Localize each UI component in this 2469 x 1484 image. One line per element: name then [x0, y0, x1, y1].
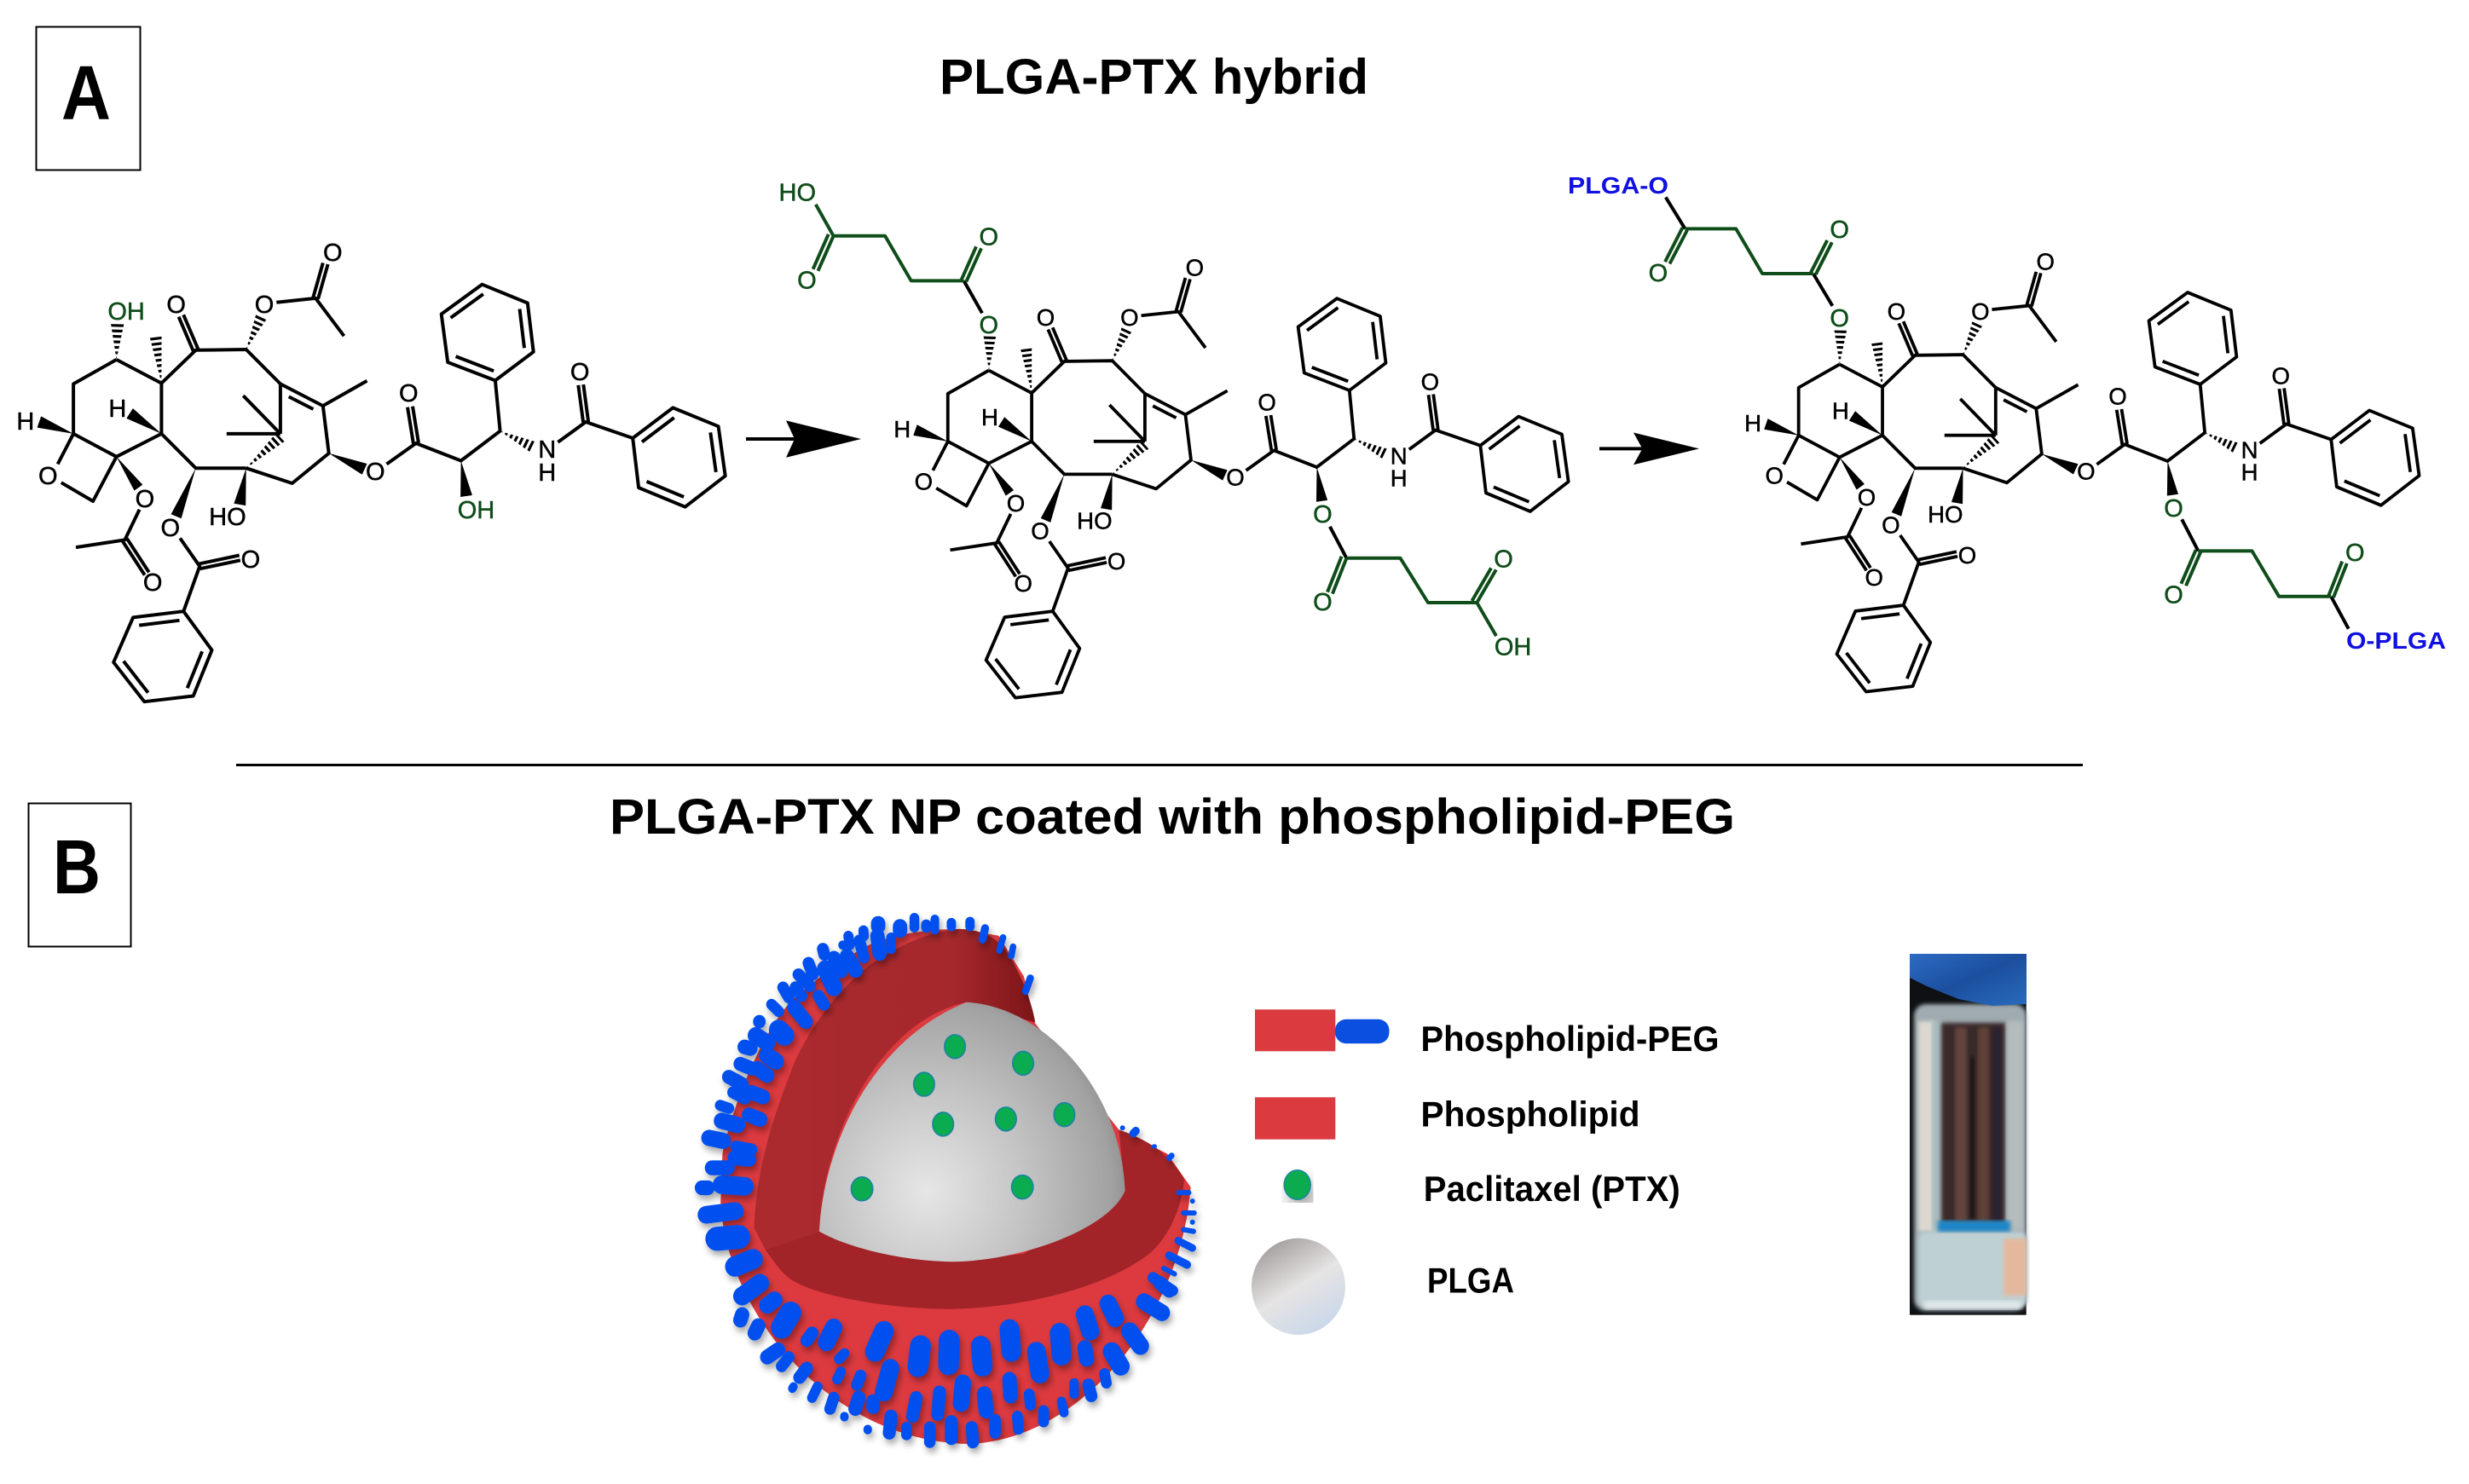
photo of vial	[1910, 954, 2027, 1315]
molecule: PLGA-PTX hybrid: O	[1971, 298, 1990, 325]
molecule: PLGA-PTX hybrid: O-PLGA	[2346, 627, 2446, 654]
legend	[1252, 1009, 1719, 1335]
molecule: paclitaxel succinate: O	[980, 312, 998, 339]
molecule: paclitaxel: O	[323, 240, 343, 267]
panel label A: A	[61, 51, 111, 136]
molecule: paclitaxel: O	[255, 292, 274, 319]
molecule: paclitaxel: O	[143, 569, 162, 597]
cut wall of the shell	[754, 929, 1035, 1250]
panel label B: B	[53, 825, 101, 910]
molecule: paclitaxel succinate: O	[797, 268, 817, 295]
molecule: paclitaxel succinate: O	[1186, 255, 1204, 281]
molecule: PLGA-PTX hybrid: O	[2108, 383, 2127, 409]
legend swatch: paclitaxel dot	[1284, 1170, 1310, 1199]
molecule: PLGA-PTX hybrid: H	[2241, 459, 2258, 485]
legend label: Phospholipid: Phospholipid	[1420, 1094, 1640, 1134]
molecule: PLGA-PTX hybrid: O	[2077, 458, 2096, 485]
molecule: PLGA-PTX hybrid: O	[1649, 260, 1668, 287]
PTX dots on the core	[851, 1035, 1075, 1201]
molecule: paclitaxel: N	[538, 436, 556, 464]
molecule: paclitaxel succinate: H	[1391, 465, 1408, 492]
molecule: paclitaxel succinate: O	[1258, 389, 1276, 416]
molecule: paclitaxel: H	[538, 459, 556, 487]
molecule: paclitaxel succinate: O	[980, 224, 998, 251]
molecule: paclitaxel succinate: O	[1107, 548, 1125, 575]
molecule: paclitaxel succinate	[779, 179, 1569, 698]
molecule: paclitaxel: O	[161, 515, 180, 542]
molecule: PLGA-PTX hybrid: O	[2164, 495, 2183, 523]
molecule: PLGA-PTX hybrid: O	[1830, 305, 1849, 332]
arrow: step two	[1599, 433, 1699, 465]
molecule: paclitaxel: H	[16, 408, 34, 436]
horizontal cut of the shell	[766, 1129, 1184, 1309]
molecule: paclitaxel succinate: HO	[1077, 507, 1113, 534]
PLGA core dome	[819, 1002, 1125, 1262]
molecule: PLGA-PTX hybrid: O	[1888, 298, 1905, 325]
legend label: Phospholipid-PEG: Phospholipid-PEG	[1420, 1019, 1719, 1059]
molecule: paclitaxel succinate: O	[1007, 490, 1025, 517]
molecule: paclitaxel succinate: O	[1037, 304, 1055, 331]
molecule: paclitaxel succinate: H	[893, 416, 911, 442]
molecule: paclitaxel: HO	[209, 504, 246, 531]
molecule: PLGA-PTX hybrid: H	[1832, 398, 1849, 424]
molecule: PLGA-PTX hybrid: O	[2037, 248, 2055, 275]
molecule: paclitaxel succinate: O	[1313, 589, 1333, 616]
molecule: paclitaxel: OH	[458, 497, 494, 524]
molecule: paclitaxel: O	[166, 292, 186, 319]
panel label A	[36, 27, 140, 170]
molecule: paclitaxel: O	[241, 546, 260, 574]
heading: PLGA-PTX NP coated with phospholipid-PEG: PLGA-PTX NP coated with phospholipid-PEG	[610, 789, 1735, 845]
molecule: paclitaxel: O	[38, 463, 58, 490]
molecule: paclitaxel: OH	[107, 298, 145, 326]
molecule: paclitaxel succinate: HO	[779, 179, 816, 206]
molecule: paclitaxel: O	[366, 459, 385, 486]
outer phospholipid shell	[720, 929, 1191, 1444]
legend swatch: phospholipid	[1255, 1097, 1335, 1140]
PEG capsules	[702, 918, 1194, 1442]
legend label: PLGA: PLGA	[1427, 1260, 1514, 1301]
molecule: PLGA-PTX hybrid: O	[2164, 582, 2183, 609]
molecule: paclitaxel succinate: N	[1391, 443, 1408, 470]
molecule: PLGA-PTX hybrid: O	[1882, 512, 1900, 539]
molecule: paclitaxel: O	[399, 380, 419, 407]
molecule: paclitaxel	[16, 240, 726, 702]
molecule: PLGA-PTX hybrid: O	[1830, 217, 1849, 244]
arrow: step one	[746, 420, 861, 458]
molecule: paclitaxel: H	[108, 396, 126, 423]
molecule: paclitaxel succinate: O	[1226, 465, 1245, 491]
molecule: paclitaxel succinate: OH	[1495, 634, 1531, 661]
molecule: paclitaxel succinate: O	[1015, 570, 1032, 597]
legend swatch: PLGA sphere	[1252, 1239, 1345, 1335]
molecule: PLGA-PTX hybrid	[1568, 172, 2446, 692]
molecule: paclitaxel succinate: O	[915, 468, 933, 494]
molecule: PLGA-PTX hybrid: O	[1858, 484, 1876, 511]
molecule: paclitaxel succinate: O	[1313, 501, 1333, 528]
heading: PLGA-PTX hybrid: PLGA-PTX hybrid	[940, 49, 1368, 105]
molecule: PLGA-PTX hybrid: HO	[1928, 501, 1963, 528]
molecule: paclitaxel: O	[136, 486, 154, 513]
molecule: paclitaxel succinate: O	[1031, 518, 1049, 545]
molecule: paclitaxel: O	[570, 359, 589, 386]
molecule: PLGA-PTX hybrid: N	[2241, 437, 2258, 464]
molecule: paclitaxel succinate: O	[1120, 304, 1139, 331]
molecule: PLGA-PTX hybrid: O	[1766, 462, 1784, 488]
molecule: paclitaxel succinate: H	[981, 404, 998, 430]
molecule: PLGA-PTX hybrid: O	[1958, 542, 1976, 569]
molecule: paclitaxel succinate: O	[1421, 369, 1439, 396]
molecule: PLGA-PTX hybrid: H	[1744, 410, 1761, 436]
legend swatch: phospholipid-PEG	[1255, 1009, 1390, 1051]
molecule: PLGA-PTX hybrid: O	[2272, 362, 2290, 390]
molecule: PLGA-PTX hybrid: PLGA-O	[1568, 172, 1668, 199]
molecule: paclitaxel succinate: O	[1494, 546, 1513, 574]
legend label: Paclitaxel (PTX): Paclitaxel (PTX)	[1424, 1169, 1680, 1209]
nanoparticle illustration	[702, 918, 1194, 1444]
panel label B	[29, 803, 131, 946]
molecule: PLGA-PTX hybrid: O	[1865, 564, 1883, 591]
molecule: PLGA-PTX hybrid: O	[2345, 540, 2365, 567]
